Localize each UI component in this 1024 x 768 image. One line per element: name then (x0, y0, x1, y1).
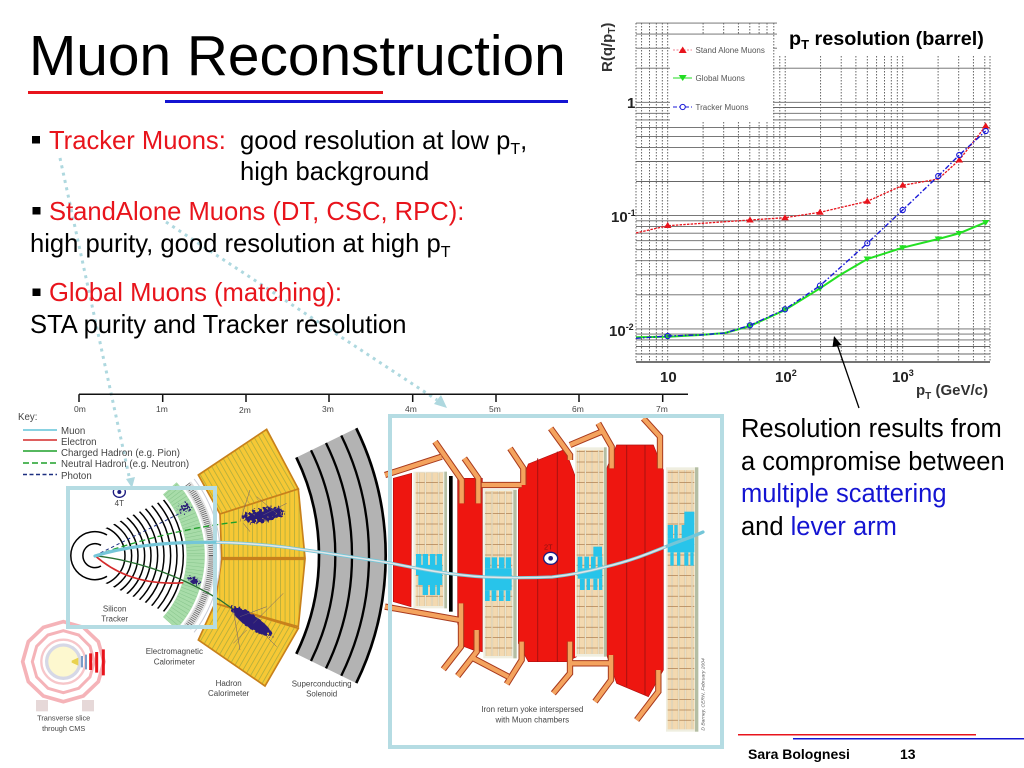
text block: standalone muons (30, 198, 464, 261)
detector labels: Calorimeter (208, 689, 250, 698)
4T field symbol (113, 487, 125, 508)
chart heading box: p (789, 28, 801, 50)
muon chambers box (385, 418, 706, 732)
cyan drift tube hits (416, 512, 694, 601)
x axis ticks (660, 368, 914, 386)
detector labels: Calorimeter (154, 657, 195, 666)
ruler scale: 1m (156, 404, 168, 414)
grid lines (636, 23, 990, 362)
text block: global muons (30, 279, 406, 339)
detector labels (101, 604, 352, 699)
x axis ticks: 10 (775, 369, 792, 386)
text block: global muons: Global Muons (matching): (49, 279, 342, 307)
dotted arrow: tracker muons to tracker (60, 158, 135, 488)
superconducting solenoid (296, 428, 386, 683)
text block: resolution note (741, 415, 1005, 541)
detector labels: Tracker (101, 615, 128, 624)
ruler scale: 7m (656, 404, 668, 414)
iron return yoke (393, 445, 663, 697)
key: Photon (61, 471, 92, 482)
legend: Tracker Muons (696, 103, 749, 112)
y axis ticks: 1 (627, 95, 635, 112)
yoke caption: with Muon chambers (494, 715, 569, 724)
orange end structures (385, 418, 660, 720)
y axis ticks: 10 (611, 209, 628, 226)
text block: tracker muons: high background (240, 158, 429, 186)
y axis ticks: 10 (609, 323, 626, 340)
preshower (184, 478, 221, 632)
title underline (28, 91, 568, 103)
text block: resolution note: and lever arm (741, 513, 897, 541)
key (18, 412, 189, 482)
text block: resolution note: multiple scattering (741, 480, 947, 508)
energy deposits (177, 503, 285, 641)
title: Muon Reconstruction (29, 25, 566, 88)
transverse slice of CMS: Transverse slice (37, 714, 90, 723)
key: Charged Hadron (e.g. Pion) (61, 448, 180, 459)
text block: tracker muons: , (520, 127, 527, 155)
detector labels: Solenoid (306, 690, 337, 699)
curve: tracker muons (636, 128, 988, 339)
ruler scale: 3m (322, 404, 334, 414)
x axis label: T (925, 391, 931, 402)
credit: D Barney, CERN, February 2004 (700, 658, 706, 731)
arrow to curve (832, 336, 859, 408)
x axis label: (GeV/c) (931, 382, 988, 399)
y axis ticks (609, 95, 636, 340)
footer: author: Sara Bolognesi (748, 746, 850, 762)
electromagnetic calorimeter (163, 482, 205, 625)
detector labels: Superconducting (292, 680, 352, 689)
detector labels: Hadron (216, 679, 242, 688)
2T field symbol (544, 542, 558, 564)
muon chambers (413, 447, 698, 732)
x axis label: p (916, 382, 925, 399)
black coil bar (449, 476, 453, 612)
ruler scale: 6m (572, 404, 584, 414)
text block: tracker muons: T (510, 141, 520, 158)
chart heading box: resolution (barrel) (809, 28, 984, 50)
ruler scale: 4m (405, 404, 417, 414)
y axis label: T (607, 28, 618, 34)
key: Key: (18, 412, 37, 423)
legend: Global Muons (696, 74, 745, 83)
dotted arrow: standalone muons to muon system (166, 222, 447, 408)
text block: tracker muons (32, 127, 527, 186)
hadron calorimeter (198, 429, 305, 686)
detector cross section: inner layers (0, 428, 386, 733)
yoke caption (481, 705, 583, 724)
key: Electron (61, 437, 97, 448)
x axis ticks: 10 (660, 369, 677, 386)
y axis ticks: -2 (626, 322, 634, 332)
box: tracker highlight (68, 488, 215, 627)
chart heading box (777, 14, 1024, 55)
text block: standalone muons: StandAlone Muons (DT, CSC, RPC): (49, 198, 464, 226)
footer: page number: 13 (900, 746, 916, 762)
ruler scale: 5m (489, 404, 501, 414)
particle tracks (95, 513, 253, 623)
y axis ticks: -1 (628, 208, 636, 218)
curve: global muons (636, 220, 989, 340)
ruler scale: 0m (74, 404, 86, 414)
silicon tracker (70, 500, 184, 612)
text block: tracker muons: Tracker Muons: (49, 127, 226, 155)
text block: global muons: STA purity and Tracker resolution (30, 311, 406, 339)
text block: standalone muons: T (441, 244, 451, 261)
y axis label: R(q/p (599, 34, 616, 72)
muon track (95, 532, 703, 578)
2T field symbol: 2T (544, 542, 553, 551)
footer lines (738, 734, 1024, 740)
shower sprays (233, 490, 287, 650)
curve: stand alone muons (636, 122, 990, 233)
x axis ticks: 2 (792, 368, 797, 378)
detector labels: Silicon (103, 604, 126, 613)
y axis label: ) (599, 23, 616, 28)
legend (670, 35, 773, 122)
text block: standalone muons: high purity, good resolution at high p (30, 230, 441, 258)
4T field symbol: 4T (115, 499, 124, 508)
chart heading box: T (801, 37, 809, 52)
x axis ticks: 10 (892, 369, 909, 386)
x axis ticks: 3 (909, 368, 914, 378)
detector labels: Electromagnetic (146, 647, 203, 656)
ruler scale: 2m (239, 405, 251, 415)
text block: resolution note: a compromise between (741, 448, 1005, 476)
ruler scale (74, 394, 688, 415)
key: Neutral Hadron (e.g. Neutron) (61, 459, 189, 470)
legend: Stand Alone Muons (696, 46, 765, 55)
transverse slice of CMS (23, 622, 104, 733)
transverse slice of CMS: through CMS (42, 724, 85, 733)
text block: tracker muons: good resolution at low p (240, 127, 510, 155)
chart: pT resolution (599, 23, 990, 402)
box: muon system highlight (390, 416, 722, 747)
yoke caption: Iron return yoke interspersed (481, 705, 583, 714)
text block: resolution note: Resolution results from (741, 415, 1002, 443)
key: Muon (61, 426, 85, 437)
